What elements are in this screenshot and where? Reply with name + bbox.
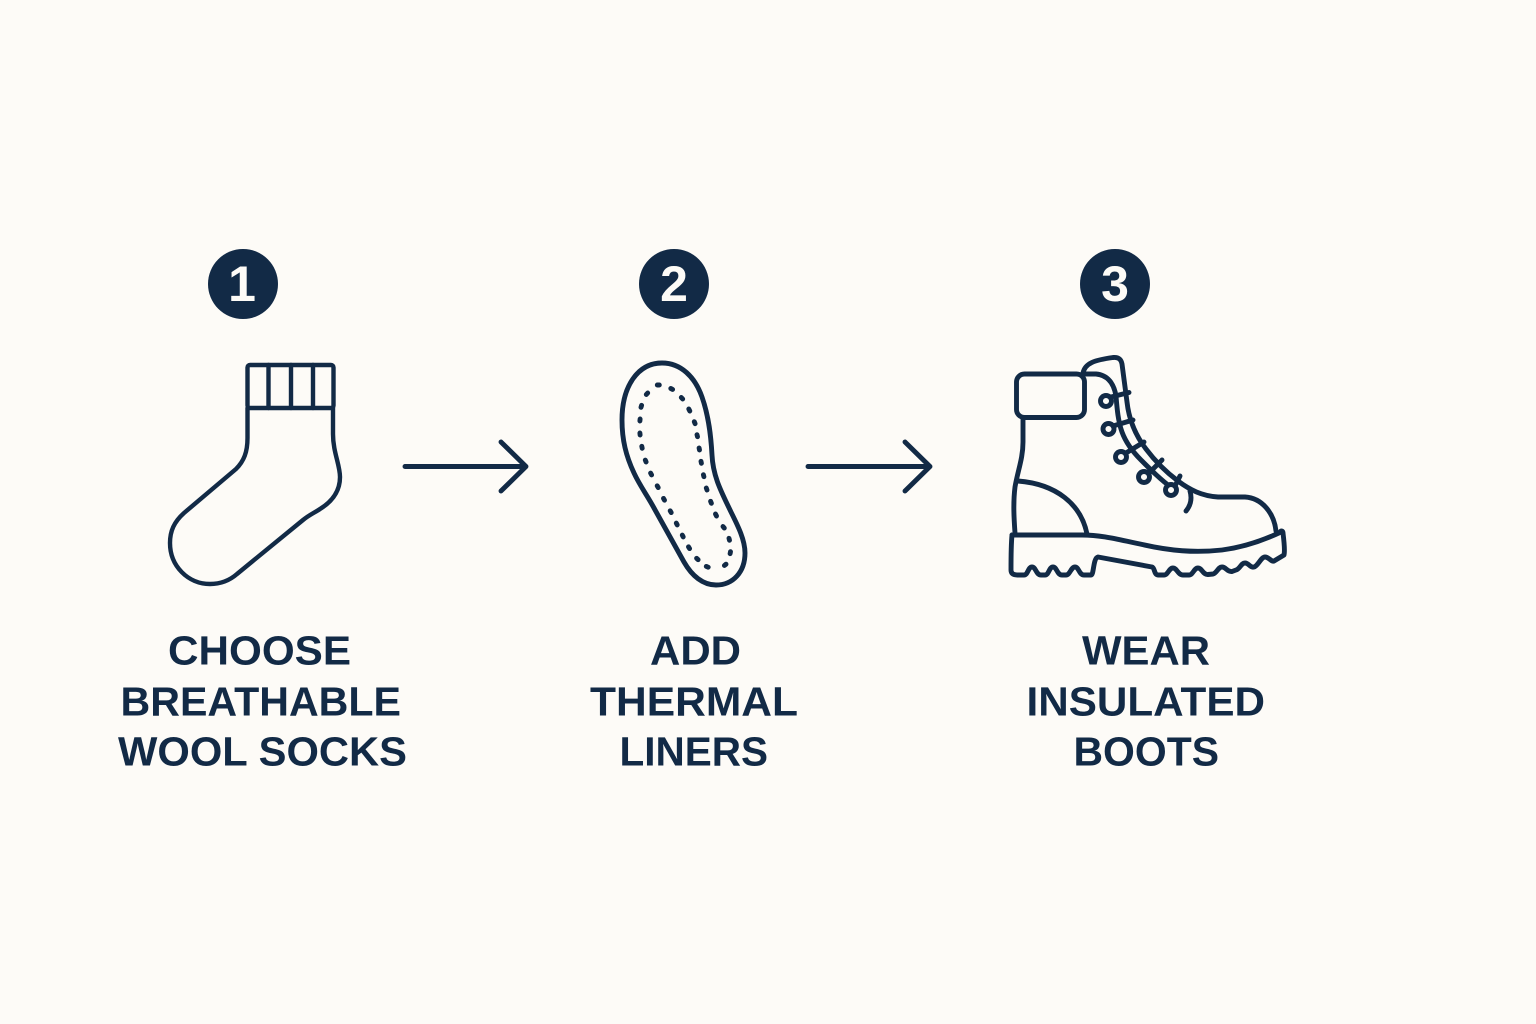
arrow: step 1 to step 2	[405, 442, 526, 491]
label: step 1	[118, 628, 407, 774]
step 3 number badge	[1080, 249, 1150, 319]
icon: thermal insole	[622, 363, 745, 585]
label: step 1: CHOOSE	[168, 628, 351, 674]
icon: wool sock	[170, 365, 340, 584]
label: step 3: BOOTS	[1074, 728, 1219, 774]
label: step 2: THERMAL	[590, 678, 798, 724]
label: step 1: WOOL SOCKS	[118, 728, 407, 774]
step 3 number badge: 3	[1101, 256, 1129, 312]
insole dotted stitching	[640, 385, 730, 567]
boot laces	[1111, 392, 1191, 511]
label: step 3: WEAR	[1082, 628, 1210, 674]
label: step 1: BREATHABLE	[120, 678, 401, 724]
boot eyelets	[1100, 396, 1176, 496]
arrow: step 2 to step 3	[808, 442, 930, 491]
boot heel back	[1014, 418, 1023, 533]
insole outline	[622, 363, 745, 585]
step 2 number badge	[639, 249, 709, 319]
icon: insulated boot	[1011, 357, 1284, 575]
sock cuff with ribs	[248, 365, 334, 408]
label: step 3: INSULATED	[1026, 678, 1265, 724]
boot tongue and vamp	[1083, 357, 1276, 531]
sock body outline	[170, 408, 340, 584]
label: step 2	[590, 628, 798, 774]
label: step 2: ADD	[650, 628, 741, 674]
step 1 number badge: 1	[228, 256, 256, 312]
step 2 number badge: 2	[660, 256, 688, 312]
boot collar	[1016, 374, 1084, 418]
label: step 2: LINERS	[620, 728, 768, 774]
boot heel counter	[1018, 481, 1087, 534]
label: step 3	[1026, 628, 1265, 774]
boot welt curve	[1012, 532, 1281, 551]
step 1 number badge	[208, 249, 278, 319]
boot inner lacing edge	[1084, 374, 1172, 488]
boot sole and tread	[1011, 531, 1284, 575]
